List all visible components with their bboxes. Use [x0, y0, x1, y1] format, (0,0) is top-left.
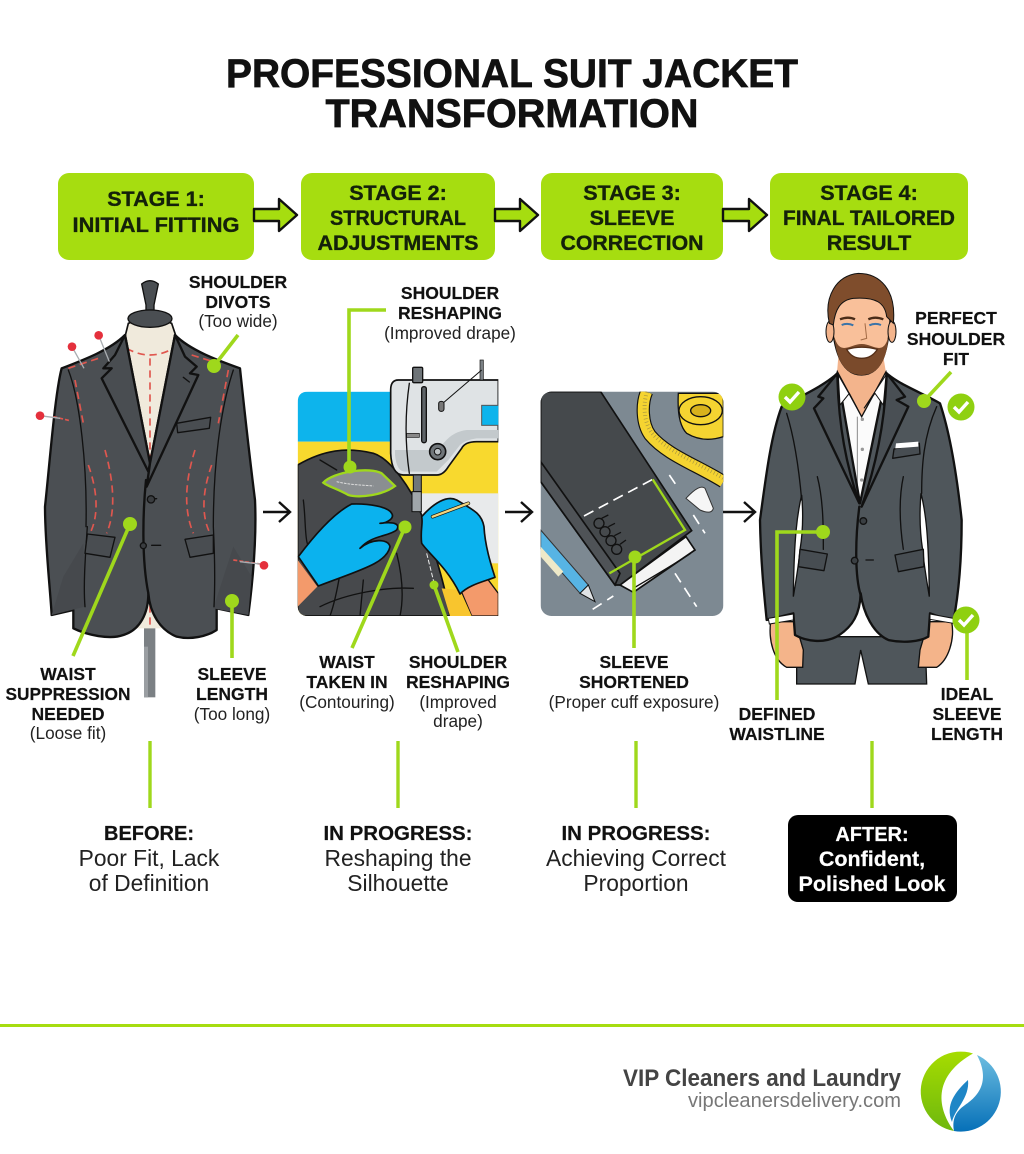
callout: perfect shoulder fit: FIT: [943, 349, 969, 369]
check badge: left shoulder: [778, 384, 806, 410]
caption: before: BEFORE:: [104, 823, 194, 845]
callout: shoulder divots: (Too wide): [198, 311, 278, 331]
illustration: sleeve panel: [541, 389, 725, 616]
callout: sleeve shortened: SHORTENED: [579, 672, 689, 692]
illustration: jacket on mannequin: [36, 281, 268, 697]
callout: waist taken in: [299, 520, 412, 712]
jacket: [760, 373, 962, 642]
caption: in progress 2: Achieving Correct: [546, 845, 727, 871]
callout: ideal sleeve length: IDEAL: [941, 684, 994, 704]
arrow: stage 1 to 2: [254, 199, 297, 231]
brand text: [623, 1065, 902, 1112]
callout: shoulder reshaping top: (Improved drape): [384, 323, 516, 343]
footer divider: [0, 1024, 1024, 1027]
caption: before: Poor Fit, Lack: [79, 845, 220, 871]
callout: perfect shoulder fit: PERFECT: [915, 308, 997, 328]
callout: shoulder reshaping lower: [406, 580, 510, 731]
stage 1 box: [58, 173, 254, 260]
callout: defined waistline: WAISTLINE: [729, 724, 825, 744]
brand text: VIP Cleaners and Laundry: [623, 1065, 902, 1092]
callout: ideal sleeve length: SLEEVE: [932, 704, 1002, 724]
callout: perfect shoulder fit: SHOULDER: [907, 329, 1005, 349]
caption: after: Polished Look: [799, 872, 946, 896]
caption: before: [79, 823, 220, 896]
hands: [770, 622, 803, 667]
caption: in progress 1: IN PROGRESS:: [324, 823, 472, 845]
callout: sleeve length: SLEEVE: [197, 664, 267, 684]
callout: sleeve shortened: (Proper cuff exposure): [549, 692, 719, 712]
stage 4 box: FINAL TAILORED: [783, 206, 955, 230]
underarm gaps: [793, 493, 929, 597]
caption: in progress 2: IN PROGRESS:: [562, 823, 710, 845]
stage 2 box: ADJUSTMENTS: [318, 231, 478, 255]
neck: [837, 357, 887, 417]
callout: shoulder reshaping lower: RESHAPING: [406, 672, 510, 692]
callout: ideal sleeve length: LENGTH: [931, 724, 1003, 744]
stage 1 box: STAGE 1:: [107, 187, 205, 211]
caption: in progress 2: [546, 823, 727, 896]
connector lines: [150, 741, 872, 808]
caption: in progress 1: Reshaping the: [324, 845, 472, 871]
stage 4 box: [770, 173, 968, 260]
shirt: [827, 372, 900, 507]
callout: waist taken in: (Contouring): [299, 692, 395, 712]
eyes: [840, 318, 883, 319]
beard: [834, 337, 888, 375]
callout: waist suppression: NEEDED: [32, 704, 104, 724]
callout: sleeve length: [194, 594, 270, 724]
stage 3 box: [541, 173, 723, 260]
caption: after: AFTER:: [835, 824, 909, 846]
title: [226, 52, 798, 136]
callout: shoulder reshaping top: [344, 283, 516, 474]
caption: after: Confident,: [819, 847, 925, 871]
callout: shoulder reshaping lower: drape): [433, 711, 483, 731]
callout: shoulder divots: SHOULDER: [189, 272, 287, 292]
stage 4 box: RESULT: [827, 231, 911, 255]
callout: defined waistline: DEFINED: [739, 704, 815, 724]
caption: after: [788, 815, 957, 902]
callout: shoulder divots: [189, 272, 287, 373]
stage 2 box: STAGE 2:: [349, 181, 447, 205]
sewing machine: [391, 360, 502, 512]
callout: perfect shoulder fit: [907, 308, 1005, 420]
pencil / ruler: [541, 530, 588, 593]
callout: waist suppression: (Loose fit): [30, 723, 106, 743]
callout: waist suppression: [6, 517, 137, 743]
caption: in progress 1: Silhouette: [347, 870, 449, 896]
caption: in progress 1: [324, 823, 472, 896]
arrow: stage 3 to 4 illustration: [723, 502, 755, 522]
title: PROFESSIONAL SUIT JACKET: [226, 52, 798, 96]
callout: shoulder reshaping top: SHOULDER: [401, 283, 499, 303]
callout: sleeve length: (Too long): [194, 704, 270, 724]
highlighted shoulder patch: [323, 470, 395, 496]
callout: waist taken in: WAIST: [319, 652, 375, 672]
logo: [921, 1052, 1001, 1132]
trousers: [797, 637, 927, 684]
callout: waist taken in: TAKEN IN: [306, 672, 388, 692]
callout: sleeve length: LENGTH: [196, 684, 268, 704]
tape measure: [643, 392, 723, 482]
callout: sleeve shortened: SLEEVE: [599, 652, 669, 672]
stage 2 box: [301, 173, 495, 260]
arrow: stage 3 to 4: [723, 199, 767, 231]
stage 3 box: SLEEVE: [590, 206, 674, 230]
callout: shoulder reshaping lower: SHOULDER: [409, 652, 507, 672]
callout: ideal sleeve length: [931, 606, 1003, 744]
title: TRANSFORMATION: [326, 92, 698, 136]
illustration: sewing panel: [298, 360, 502, 618]
stage 1 box: INITIAL FITTING: [72, 213, 240, 237]
stage 3 box: STAGE 3:: [583, 181, 681, 205]
stage 4 box: STAGE 4:: [820, 181, 918, 205]
callout: sleeve shortened: [549, 550, 719, 712]
stage 3 box: CORRECTION: [560, 231, 704, 255]
arrow: stage 2 to 3 illustration: [505, 502, 532, 522]
callout: shoulder reshaping lower: (Improved: [419, 692, 497, 712]
head: [831, 297, 890, 375]
illustration: tailored man: [760, 273, 962, 684]
callout: waist suppression: SUPPRESSION: [6, 684, 130, 704]
stage 2 box: STRUCTURAL: [330, 206, 466, 230]
chalk: [686, 487, 713, 512]
right glove: [421, 499, 495, 594]
left glove: [298, 504, 398, 586]
arrow: before to stage 2: [263, 502, 290, 522]
caption: before: of Definition: [89, 870, 209, 896]
arrow: stage 2 to 3: [495, 199, 538, 231]
brand text: vipcleanersdelivery.com: [688, 1090, 901, 1112]
callout: shoulder reshaping top: RESHAPING: [398, 303, 502, 323]
callout: waist suppression: WAIST: [40, 664, 96, 684]
callout: defined waistline: [729, 525, 830, 744]
hair: [828, 273, 894, 325]
callout: shoulder divots: DIVOTS: [205, 292, 271, 312]
caption: in progress 2: Proportion: [583, 870, 689, 896]
